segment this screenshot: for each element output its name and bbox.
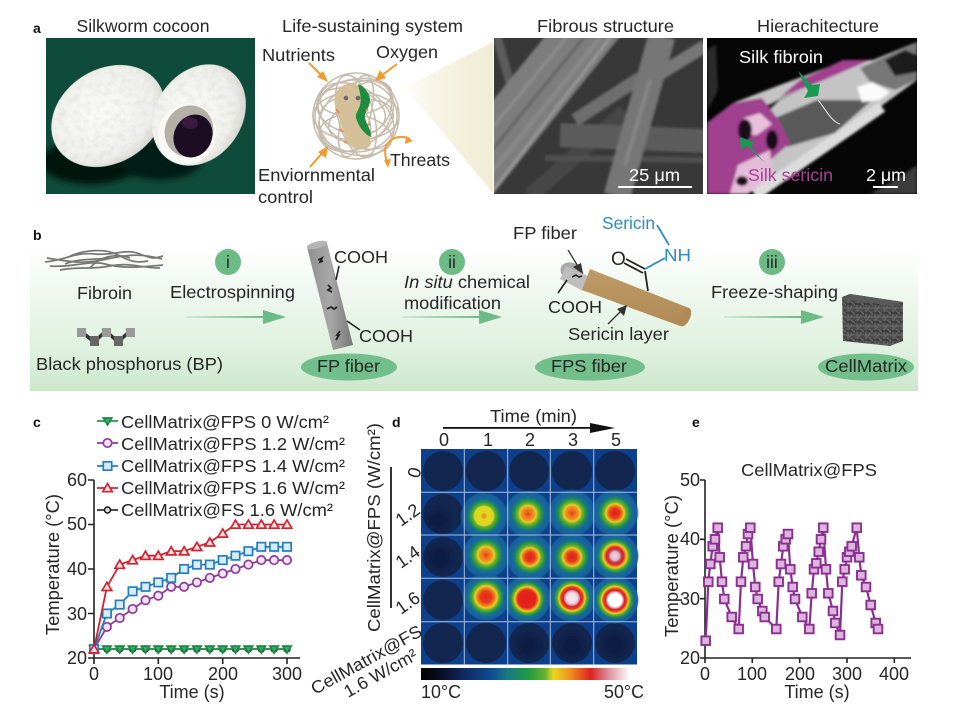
axis label: 1.6 W/cm2: 1.6 W/cm² [340, 645, 421, 701]
panel label a: a [33, 20, 41, 36]
label: nutrients: Nutrients [262, 45, 335, 65]
legend: CellMatrix@FPS 0 W/cm² [121, 412, 329, 432]
arrow: step iii [724, 310, 824, 324]
y axis tick labels [67, 470, 87, 668]
y axis tick labels: 50 [680, 470, 700, 490]
row label 1.6: 1.6 [392, 588, 424, 618]
scale bar: 25 μm [618, 186, 692, 188]
arrow: step ii [402, 310, 502, 324]
label: threats: Threats [390, 150, 450, 170]
row bracket line [390, 467, 392, 608]
SEM image: hierarchical fiber [707, 38, 917, 195]
step badge i [215, 249, 241, 275]
amide bonds [624, 225, 669, 291]
series: FPS 1.2 W/cm2 [94, 560, 287, 649]
x axis title: Time (s) [784, 682, 850, 702]
y axis tick labels: 40 [680, 529, 700, 549]
axes [88, 480, 300, 664]
label: silk fibroin: Silk fibroin [739, 47, 823, 67]
label: control: control [258, 187, 313, 207]
thermal image grid [421, 449, 639, 664]
step badge ii: ii [448, 252, 456, 272]
scale label: 2 μm: 2 μm [866, 165, 906, 185]
x axis tick labels [700, 664, 909, 684]
label: sericin: Sericin [602, 213, 655, 233]
series: heating cycles [706, 528, 878, 641]
y axis tick labels: 50 [67, 514, 87, 534]
y axis tick labels: 40 [67, 559, 87, 579]
panel label e: e [692, 414, 700, 430]
column labels: 5 [611, 430, 621, 450]
y axis tick labels: 20 [67, 648, 87, 668]
x axis tick labels: 200 [785, 664, 815, 684]
series: FPS 1.6 W/cm2 [94, 524, 287, 649]
x axis title: Time (s) [159, 682, 225, 702]
bond: COOH bottom [347, 321, 360, 330]
panel e: cycling chart [662, 414, 911, 702]
step badge iii: iii [766, 252, 778, 272]
label: black phosphorus: Black phosphorus (BP) [36, 354, 223, 374]
label: COOH: COOH [548, 297, 602, 317]
label: in situ chemical modification: In situ chemical [404, 272, 530, 292]
gradient background band [30, 248, 918, 391]
step badge iii [759, 249, 785, 275]
colour scale bar [421, 668, 628, 680]
FP fiber tag [301, 354, 397, 380]
FPS fiber tag: FPS fiber [551, 356, 627, 376]
label: sericin layer: Sericin layer [568, 324, 669, 344]
legend: CellMatrix@FS 1.6 W/cm² [121, 500, 333, 520]
x axis tick labels [89, 664, 302, 684]
axis title: CellMatrix@FPS: CellMatrix@FPS (W/cm²) [364, 423, 384, 632]
worm green stripe [356, 84, 371, 137]
scale bar: 2 μm [873, 186, 898, 188]
label: fibroin: Fibroin [77, 283, 132, 303]
x axis tick labels: 400 [879, 664, 909, 684]
y axis title: Temperature (°C) [662, 495, 682, 637]
series: FS 1.6 W/cm2 [94, 648, 287, 650]
column labels [439, 430, 621, 450]
label: freeze-shaping: Freeze-shaping [711, 282, 838, 302]
legend: CellMatrix@FPS 1.4 W/cm² [121, 456, 345, 476]
worm body [334, 84, 371, 150]
arrow: FP fiber pointer [568, 250, 583, 274]
panel c: temperature line chart [33, 412, 345, 702]
legend: CellMatrix@FPS 1.2 W/cm² [121, 434, 345, 454]
panel d: thermal image grid [307, 406, 644, 702]
column labels: 1 [483, 430, 493, 450]
x axis tick labels: 300 [832, 664, 862, 684]
time arrow [443, 423, 615, 433]
row label 1.2: 1.2 [392, 500, 424, 530]
panel a: life-sustaining silk system [32, 16, 917, 207]
arrow: threats [384, 136, 413, 168]
arrow: nutrients [309, 63, 328, 82]
panel label c: c [33, 414, 41, 430]
legend [97, 412, 345, 520]
label: COOH bottom: COOH [359, 326, 413, 346]
diagram: cocoon sphere with worm [305, 66, 407, 166]
arrow: sericin layer pointer [608, 305, 627, 324]
axes [700, 480, 911, 663]
FP fiber cylinder [306, 239, 353, 350]
label: electrospinning: Electrospinning [170, 282, 295, 302]
y axis tick labels: 60 [67, 470, 87, 490]
CellMatrix cube icon [842, 294, 903, 346]
icon: fibroin strands [45, 251, 163, 270]
label: silk sericin: Silk sericin [748, 165, 833, 185]
axis title: time: Time (min) [490, 406, 577, 426]
heading: life-sustaining system: Life-sustaining system [282, 16, 463, 36]
panel label b: b [33, 227, 42, 243]
y axis tick labels: 30 [680, 589, 700, 609]
x axis tick labels: 100 [737, 664, 767, 684]
label: NH: NH [664, 245, 691, 265]
heading: hierarchitecture: Hierachitecture [757, 16, 879, 36]
legend: CellMatrix@FPS 1.6 W/cm² [121, 478, 345, 498]
FPS fiber cylinder [557, 259, 694, 328]
arrow: environmental control [310, 146, 328, 167]
colour scale label: 10°C: 10°C [421, 682, 461, 702]
label: oxygen atom: O [611, 249, 626, 270]
label: oxygen: Oxygen [376, 42, 438, 62]
x axis tick labels: 300 [272, 664, 302, 684]
scale label: 25 μm: 25 μm [629, 165, 680, 185]
y axis tick labels [680, 470, 700, 668]
x axis tick labels: 0 [700, 664, 710, 684]
panel label d: d [392, 414, 401, 430]
series: FPS 0 W/cm2 [94, 648, 287, 650]
axis label: CellMatrix@FS: CellMatrix@FS [307, 621, 425, 698]
y axis tick labels: 20 [680, 648, 700, 668]
x axis tick labels: 100 [143, 664, 173, 684]
column labels: 0 [439, 430, 449, 450]
label: modification: modification [404, 293, 501, 313]
step badge i: i [226, 252, 230, 272]
step badge ii [439, 249, 465, 275]
label: FP fiber: FP fiber [513, 223, 577, 243]
series: FPS 1.4 W/cm2 [94, 547, 287, 649]
bond: COOH top [336, 266, 339, 280]
row label 1.4: 1.4 [392, 542, 424, 572]
chart title: CellMatrix@FPS [741, 460, 877, 480]
CellMatrix tag [818, 354, 914, 380]
panel b: fabrication workflow [30, 213, 918, 391]
column labels: 2 [525, 430, 535, 450]
colour scale label: 50°C: 50°C [604, 682, 644, 702]
label: environmental control: Enviornmental [258, 165, 375, 185]
zoom beam connecting to fibrous structure [405, 42, 493, 193]
CellMatrix tag: CellMatrix [825, 356, 907, 376]
bond: COOH on FPS [558, 280, 567, 293]
y axis tick labels: 30 [67, 604, 87, 624]
row label 0: 0 [404, 465, 425, 480]
arrow: oxygen [375, 64, 397, 81]
FPS fiber tag [535, 354, 645, 380]
arrow: step i [186, 310, 286, 324]
x axis tick labels: 0 [89, 664, 99, 684]
y axis title: Temperature (°C) [43, 494, 63, 635]
SEM image: fibrous structure [490, 34, 705, 198]
heading: silkworm cocoon: Silkworm cocoon [76, 16, 209, 36]
column labels: 3 [568, 430, 578, 450]
heading: fibrous structure: Fibrous structure [537, 16, 674, 36]
photo: silkworm cocoons [46, 38, 255, 194]
FP fiber tag: FP fiber [317, 356, 380, 376]
label: COOH top: COOH [334, 247, 388, 267]
x axis tick labels: 200 [208, 664, 238, 684]
icon: black phosphorus [77, 328, 135, 346]
